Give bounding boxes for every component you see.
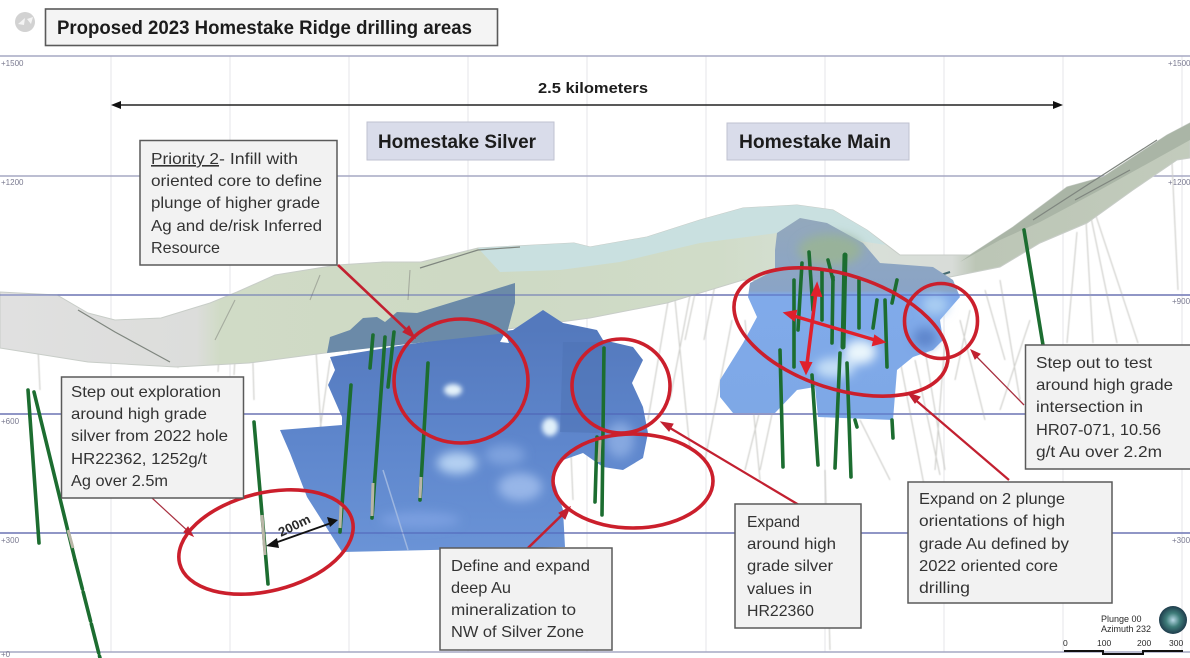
ellipse: step out silver zone (168, 473, 364, 611)
callout: deep Au (440, 548, 612, 650)
callout: HR22360: values in (747, 581, 812, 598)
elevation labels: +1500 (1168, 59, 1190, 68)
callout: plunge orientations: grade Au defined by (919, 536, 1069, 553)
elevation labels: +1200 (1, 178, 24, 187)
title: Proposed 2023 Homestake Ridge drilling areas (57, 17, 472, 39)
elevation labels: +600 (1, 417, 20, 426)
callout: Priority 2: Priority 2 (151, 151, 219, 168)
elevation labels: +1200 (1168, 178, 1190, 187)
callout: step out exploration: silver from 2022 hole (71, 428, 228, 445)
callout: Priority 2: Ag and de/risk Inferred (151, 218, 322, 235)
callout: HR22360: HR22360 (747, 603, 814, 620)
callout: Priority 2: oriented core to define (151, 173, 322, 190)
heading: Homestake Main: Homestake Main (739, 131, 891, 153)
callout: Priority 2 (140, 140, 337, 265)
orientation legend and scale bar: 300 (1169, 638, 1183, 648)
elevation labels: +300 (1172, 536, 1190, 545)
2.5 kilometers span arrow (111, 80, 1063, 109)
terrain surface (0, 123, 1190, 367)
callout: step out exploration: HR22362, 1252g/t (71, 451, 208, 468)
callout: deep Au: deep Au (451, 580, 511, 597)
callout leader arrows (152, 265, 1024, 548)
ellipse: deep Au zone (553, 434, 713, 528)
callout: deep Au: NW of Silver Zone (451, 624, 584, 641)
elevation labels: +900 (1172, 297, 1190, 306)
mineralization body: Homestake Main (720, 218, 960, 420)
callout: step out exploration (62, 377, 244, 498)
title (46, 9, 498, 46)
callout: HR07-071: HR07-071, 10.56 (1036, 422, 1161, 439)
callout: Priority 2: plunge of higher grade (151, 195, 320, 212)
elevation labels: +600 (1172, 417, 1190, 426)
callout: HR22360: Expand (747, 514, 800, 531)
thin historic drill traces (11, 163, 1178, 650)
ellipse: Priority 2 zone (394, 319, 528, 443)
ellipse: Homestake Main plunge zone (718, 243, 964, 421)
callout: step out exploration: around high grade (71, 406, 207, 423)
heading: Homestake Silver (367, 122, 554, 160)
callout: step out exploration: Step out exploration (71, 384, 221, 401)
ellipse: HR07-071 step out zone (904, 284, 978, 358)
mineralization body: Homestake Silver (280, 283, 648, 552)
200m distance marker (266, 511, 338, 548)
orientation legend and scale bar: 0 (1063, 638, 1068, 648)
orientation legend and scale bar: Azimuth 232 (1101, 624, 1151, 634)
callout: HR07-071: g/t Au over 2.2m (1036, 444, 1162, 461)
terrain detail strokes (78, 123, 1190, 362)
callout: Priority 2: Resource (151, 240, 220, 257)
callout: plunge orientations: Expand on 2 plunge (919, 491, 1065, 508)
callout: HR07-071 (1026, 345, 1190, 469)
callout: plunge orientations (908, 482, 1112, 603)
orientation legend and scale bar: 200 (1137, 638, 1151, 648)
callout: plunge orientations: 2022 oriented core (919, 558, 1058, 575)
callout: deep Au: Define and expand (451, 558, 590, 575)
callout: step out exploration: Ag over 2.5m (71, 473, 168, 490)
icon: faded globe logo (15, 12, 35, 32)
callout: plunge orientations: drilling (919, 580, 970, 597)
callout: HR07-071: around high grade (1036, 377, 1173, 394)
heading: Homestake Silver: Homestake Silver (378, 131, 536, 153)
orientation legend and scale bar: 100 (1097, 638, 1111, 648)
callout: Priority 2: - Infill with (219, 151, 298, 168)
callout: HR07-071: Step out to test (1036, 355, 1153, 372)
orientation legend and scale bar (1063, 606, 1187, 654)
200m distance marker: 200m (276, 511, 313, 540)
callout: deep Au: mineralization to (451, 602, 576, 619)
callout: HR22360: around high (747, 536, 836, 553)
callout: plunge orientations: orientations of high (919, 513, 1065, 530)
callout: HR22360: grade silver (747, 558, 834, 575)
elevation labels: +1500 (1, 59, 24, 68)
callout: HR07-071: intersection in (1036, 399, 1143, 416)
elevation labels: +900 (1, 297, 20, 306)
horizontal grid overlay (0, 295, 1190, 533)
red double arrows: plunge orientations (785, 284, 884, 373)
green drill holes (28, 230, 1043, 658)
2.5 kilometers span arrow: 2.5 kilometers (538, 80, 648, 97)
ellipse: HR22360 zone (572, 339, 670, 433)
callout: HR22360 (735, 504, 861, 628)
orientation legend and scale bar: Plunge 00 (1101, 614, 1142, 624)
heading: Homestake Main (727, 123, 909, 160)
elevation labels: +300 (1, 536, 20, 545)
icon: globe (1159, 606, 1187, 634)
